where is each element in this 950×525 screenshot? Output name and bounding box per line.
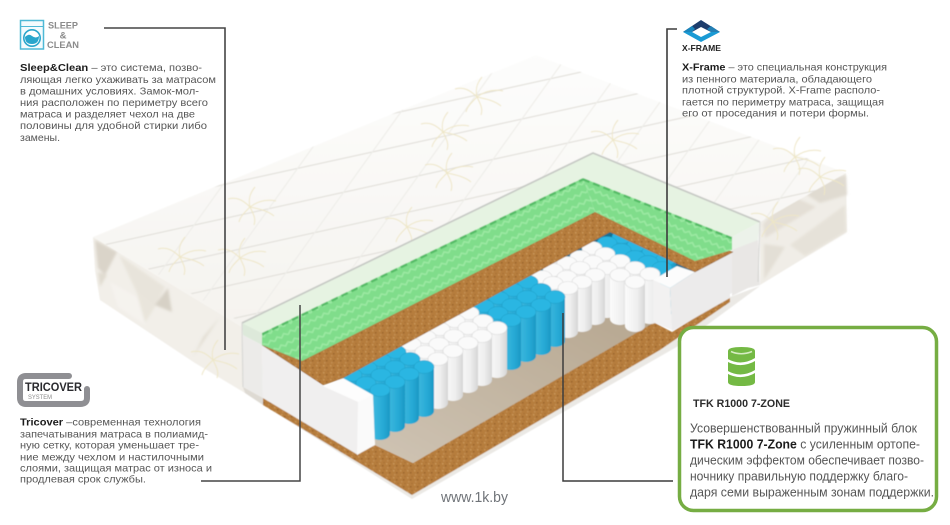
text block: X-Frame bbox=[682, 62, 887, 120]
text block: Tricover bbox=[20, 416, 212, 486]
panel body text: Усовершенствованный пружинный блок bbox=[690, 420, 917, 436]
panel: TFK R1000 7-Zone spring block bbox=[680, 328, 936, 510]
pale base edge bbox=[245, 286, 760, 499]
text block: Tricover: слоями, защищая матрас от износа и bbox=[20, 462, 212, 474]
icon: Sleep & Clean bbox=[20, 20, 79, 51]
text block: X-Frame: из пенного материала, обладающего bbox=[682, 74, 872, 86]
right block side bbox=[670, 240, 758, 331]
gold leaf embroidery bbox=[158, 77, 846, 378]
panel body text: даря семи выраженным зонам поддержки. bbox=[690, 484, 934, 500]
text block: Sleep&Clean: ния расположен по периметру всего bbox=[20, 97, 208, 109]
icon: Sleep & Clean: CLEAN bbox=[47, 40, 79, 51]
panel body text: TFK R1000 7-Zone с усиленным ортопе- bbox=[690, 436, 920, 452]
text block: Sleep&Clean: половины для удобной стирки либо bbox=[20, 120, 207, 132]
green memory foam layer bbox=[262, 178, 732, 361]
text block: Tricover: продлевая срок службы. bbox=[20, 474, 146, 486]
panel body text: ночнику правильную поддержку благо- bbox=[690, 468, 908, 484]
text block: X-Frame: его от проседания и потери формы. bbox=[682, 108, 869, 120]
text block: Sleep&Clean: Sleep&Clean – это система, позво- bbox=[20, 62, 203, 74]
icon: spring block cylinder bbox=[727, 347, 756, 386]
mattress right side face bbox=[760, 173, 847, 285]
icon: X-Frame: X-FRAME bbox=[682, 43, 721, 53]
mattress left side face bbox=[93, 237, 245, 393]
icon: Tricover System: TRICOVER bbox=[25, 382, 83, 394]
icon: X-Frame bbox=[682, 20, 721, 53]
translucent top comfort layer bbox=[242, 153, 760, 387]
mattress quilted top bbox=[94, 64, 842, 326]
panel heading: TFK R1000 7-ZONE bbox=[693, 398, 790, 410]
top coir layer bbox=[262, 212, 733, 385]
front block top bbox=[325, 378, 373, 402]
text block: Tricover: Tricover –современная технология bbox=[20, 416, 201, 428]
text block: Tricover: ную сетку, которая уменьшает тре- bbox=[20, 440, 200, 452]
mattress body bbox=[93, 64, 848, 392]
right block top bbox=[653, 266, 695, 288]
text block: X-Frame: X-Frame – это специальная конструкция bbox=[682, 62, 887, 74]
right block front face bbox=[653, 280, 672, 330]
icon: Tricover System: SYSTEM bbox=[28, 395, 52, 401]
leader line: Sleep&Clean bbox=[104, 28, 225, 350]
text block: Tricover: запечатывания матраса в полиамид- bbox=[20, 428, 209, 440]
cavity shadow bbox=[500, 232, 695, 300]
text block: Tricover: ние между чехлом и настилочными bbox=[20, 452, 204, 464]
icon: Tricover System bbox=[20, 376, 87, 404]
panel body text bbox=[690, 420, 934, 500]
text block: X-Frame: плотной структурой. X-Frame располо- bbox=[682, 84, 881, 96]
leader line: spring block bbox=[563, 313, 673, 481]
bottom coir layer and cavity floor bbox=[245, 232, 760, 499]
x-frame foam perimeter blocks bbox=[243, 238, 760, 455]
icon: Sleep & Clean: SLEEP bbox=[48, 20, 79, 32]
text block: Sleep&Clean: в домашних условиях. Замок-мол- bbox=[20, 86, 200, 98]
panel body text: дическим эффектом обеспечивает позво- bbox=[690, 452, 924, 468]
left cut strip bbox=[243, 335, 263, 398]
watermark: www.1k.by bbox=[440, 489, 508, 506]
pocket springs bbox=[342, 230, 676, 440]
front block face bbox=[262, 345, 358, 455]
text block: Sleep&Clean: ляющая легко ухаживать за матрасом bbox=[20, 74, 216, 86]
text block: X-Frame: гается по периметру матраса, защищая bbox=[682, 96, 884, 108]
text block: Sleep&Clean bbox=[20, 62, 216, 144]
icon: Sleep & Clean: & bbox=[60, 30, 67, 42]
cavity floor bbox=[370, 300, 655, 463]
mattress cutaway bbox=[242, 153, 760, 499]
bottom coir slab bbox=[263, 296, 730, 495]
text block: Sleep&Clean: матраса и разделяет чехол на две bbox=[20, 108, 195, 120]
leader line: X-Frame bbox=[667, 29, 677, 277]
leader line: Tricover bbox=[201, 305, 300, 481]
text block: Sleep&Clean: замены. bbox=[20, 132, 60, 144]
